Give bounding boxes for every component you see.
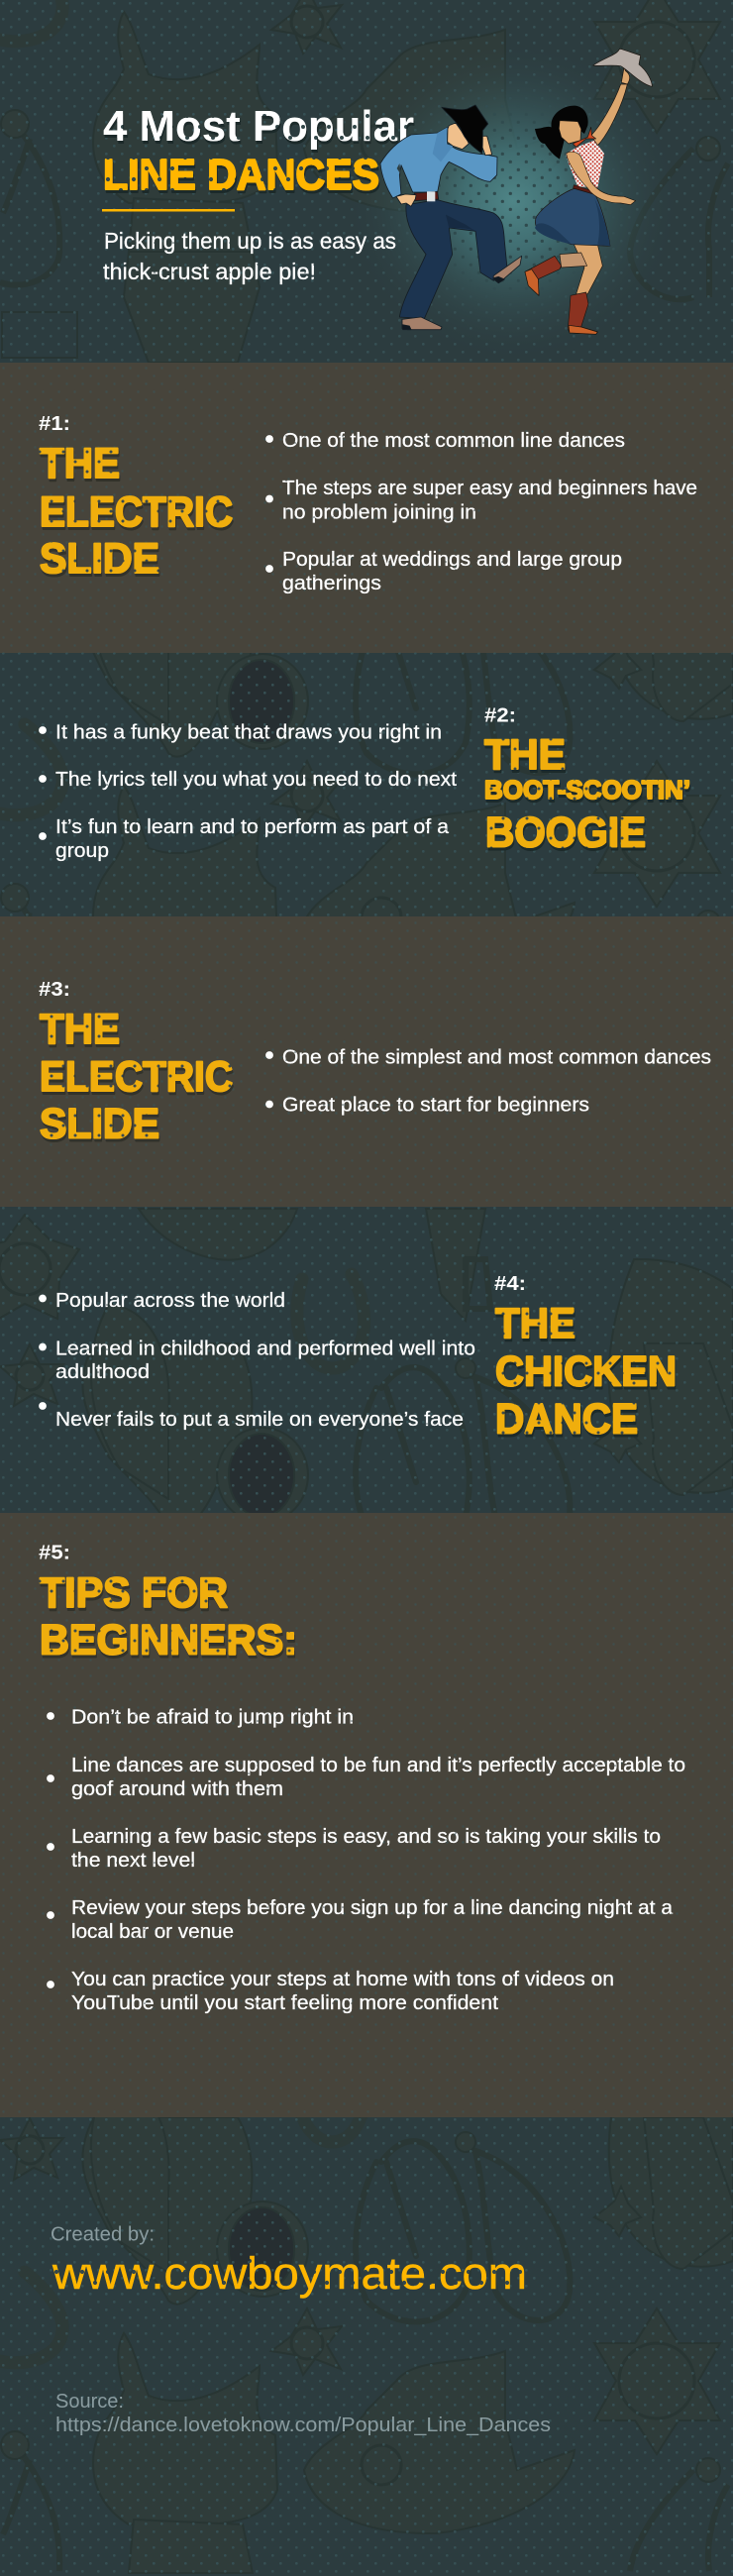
source (55, 2391, 551, 2436)
panel: #3 The Electric Slide (0, 916, 733, 1207)
heading: THE (40, 440, 120, 487)
bullet list: Popular across the world (55, 1290, 285, 1312)
heading (495, 1300, 677, 1443)
bullet list: Don’t be afraid to jump right in (71, 1706, 354, 1728)
heading (484, 731, 690, 856)
subtitle: Picking them up is as easy as (104, 228, 396, 254)
bullet list: The steps are super easy and beginners have (282, 478, 697, 499)
heading: CHICKEN (495, 1347, 677, 1395)
heading: BOOT-SCOOTIN’ (484, 775, 690, 805)
subtitle: thick-crust apple pie! (103, 259, 316, 284)
bullet list: no problem joining in (282, 501, 476, 523)
bullet list: Popular at weddings and large group (282, 549, 622, 571)
section number: #1: (39, 413, 70, 435)
heading: THE (484, 731, 566, 779)
heading: SLIDE (40, 535, 159, 583)
subtitle (103, 228, 396, 284)
bullet list (39, 1290, 475, 1431)
bullet list: Learning a few basic steps is easy, and so is taking your skills to (71, 1826, 661, 1848)
created by label: Created by: (51, 2223, 155, 2245)
illustration: dancing cowboy (380, 105, 522, 330)
bullet list: goof around with them (71, 1778, 283, 1800)
bullet list: gatherings (282, 573, 381, 594)
source: https://dance.lovetoknow.com/Popular_Line_Dances (55, 2415, 551, 2436)
bullet list: Review your steps before you sign up for a line dancing night at a (71, 1897, 674, 1919)
divider under title (102, 209, 235, 212)
panel: footer (0, 2117, 733, 2574)
heading: DANCE (495, 1395, 638, 1443)
section number: #4: (494, 1273, 526, 1295)
panel: #5 Tips for beginners (0, 1513, 733, 2117)
bullet list: local bar or venue (71, 1921, 234, 1943)
bullet list: One of the most common line dances (282, 430, 625, 452)
bullet list: It’s fun to learn and to perform as part of a (55, 816, 450, 838)
bullet list (265, 1046, 711, 1116)
source: Source: (55, 2391, 124, 2413)
bullet list: Learned in childhood and performed well into (55, 1338, 475, 1359)
bullet list: YouTube until you start feeling more confident (71, 1992, 498, 2014)
bullet list: One of the simplest and most common dances (282, 1046, 711, 1068)
bullet list: You can practice your steps at home with tons of videos on (71, 1969, 614, 1990)
title: LINE DANCES (103, 151, 379, 199)
panel: #4 The Chicken Dance (0, 1207, 733, 1513)
bullet list (265, 430, 697, 594)
bullet list: It has a funky beat that draws you right in (55, 721, 442, 743)
heading (40, 1569, 297, 1664)
heading: ELECTRIC (40, 1053, 233, 1101)
section number: #5: (39, 1542, 70, 1563)
title: 4 Most Popular (103, 102, 414, 151)
bullet list: Never fails to put a smile on everyone’s face (55, 1409, 464, 1431)
title (103, 102, 414, 199)
bullet list: adulthood (55, 1361, 150, 1383)
heading: TIPS FOR (40, 1569, 228, 1617)
heading: THE (495, 1300, 576, 1347)
website url: www.cowboymate.com (52, 2248, 527, 2299)
heading: SLIDE (40, 1100, 159, 1147)
heading (40, 1006, 233, 1147)
bullet list: Great place to start for beginners (282, 1094, 589, 1116)
panel: hero (0, 0, 733, 363)
section number: #3: (39, 979, 70, 1001)
panel: #2 The Boot-Scootin' Boogie (0, 653, 733, 916)
section number: #2: (484, 705, 516, 727)
illustration: dancing cowgirl (525, 49, 652, 334)
panel: #1 The Electric Slide (0, 363, 733, 653)
bullet list: group (55, 840, 109, 862)
heading: BEGINNERS: (40, 1617, 297, 1664)
heading: THE (40, 1006, 120, 1053)
bullet list: the next level (71, 1850, 195, 1872)
bullet list (47, 1706, 685, 2014)
bullet list: The lyrics tell you what you need to do next (55, 769, 457, 791)
heading: ELECTRIC (40, 488, 233, 536)
heading: BOOGIE (485, 808, 646, 856)
bullet list: Line dances are supposed to be fun and it’s perfectly acceptable to (71, 1755, 685, 1776)
heading (40, 440, 233, 583)
bullet list (39, 721, 457, 862)
